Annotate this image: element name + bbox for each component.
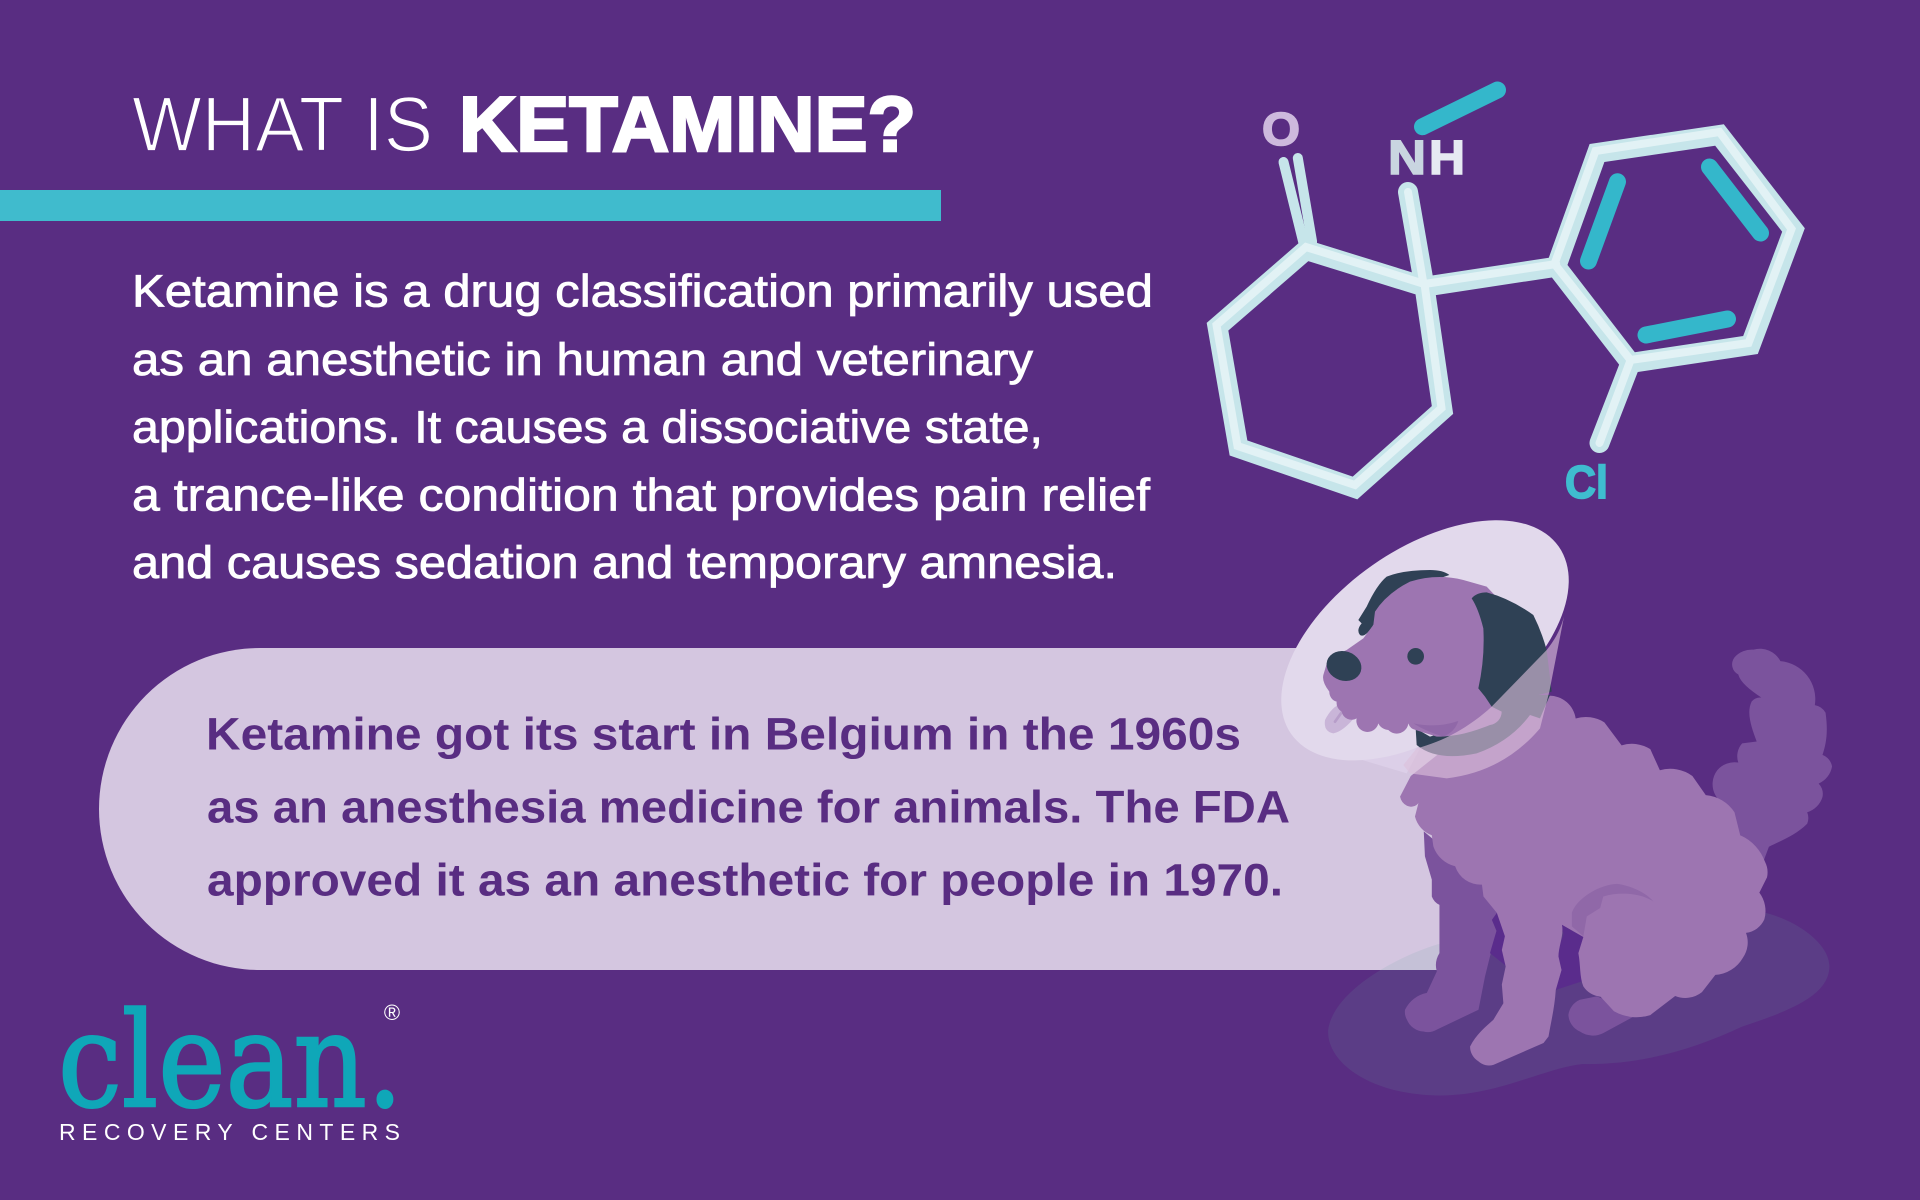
atom label: NH [1388,132,1465,185]
intro paragraph: and causes sedation and temporary amnesia. [132,537,1117,588]
tongue [1325,703,1357,733]
callout text: as an anesthesia medicine for animals. The FDA [207,782,1290,833]
callout text [206,708,1290,906]
haunch detail [1572,884,1653,936]
cone opening [1239,472,1611,809]
molecule teal bonds [1422,90,1760,335]
dog eye [1407,648,1424,665]
molecule bonds [1216,132,1794,488]
intro paragraph: as an anesthetic in human and veterinary [132,334,1034,385]
collar and neck [1416,695,1550,756]
atom label: oxygen: O [1262,103,1300,155]
logo [58,984,403,1145]
cone and head [1239,472,1611,809]
intro paragraph: Ketamine is a drug classification primarily used [132,266,1153,316]
cone body overlay [1403,617,1564,778]
molecule: ketamine structure [1216,90,1794,488]
dog illustration with cone [1239,472,1832,1095]
far front leg [1405,831,1497,1032]
tail [1713,649,1832,862]
dog nose [1323,647,1365,685]
registered mark: ® [384,1000,400,1025]
atom label: NH: H [1429,132,1465,185]
intro paragraph: a trance-like condition that provides pain relief [132,470,1151,520]
callout text: approved it as an anesthetic for people in 1970. [207,855,1283,906]
dog body parts [1328,649,1832,1095]
far hind foot [1568,996,1640,1036]
intro paragraph: applications. It causes a dissociative state, [132,402,1043,452]
title underline bar [0,190,941,221]
callout text: Ketamine got its start in Belgium in the 1960s [206,708,1241,760]
title: KETAMINE? [459,80,916,168]
cone side on pill [1313,745,1420,773]
dark fur on head [1358,570,1449,636]
intro paragraph [132,266,1153,588]
logo wordmark: clean. [58,984,403,1137]
dog ear [1472,592,1552,707]
atom label: NH: N [1388,132,1426,185]
tongue line [1335,712,1342,722]
dog head [1323,577,1547,737]
logo tagline: RECOVERY CENTERS [59,1119,400,1145]
mouth shading [1413,721,1458,737]
title [132,80,916,168]
dog body [1400,696,1768,1066]
ground shadow [1328,912,1829,1095]
atom label: chlorine: Cl [1565,456,1608,508]
callout pill [99,648,1440,970]
gaps under body [1490,913,1583,990]
title: WHAT IS [132,80,433,168]
